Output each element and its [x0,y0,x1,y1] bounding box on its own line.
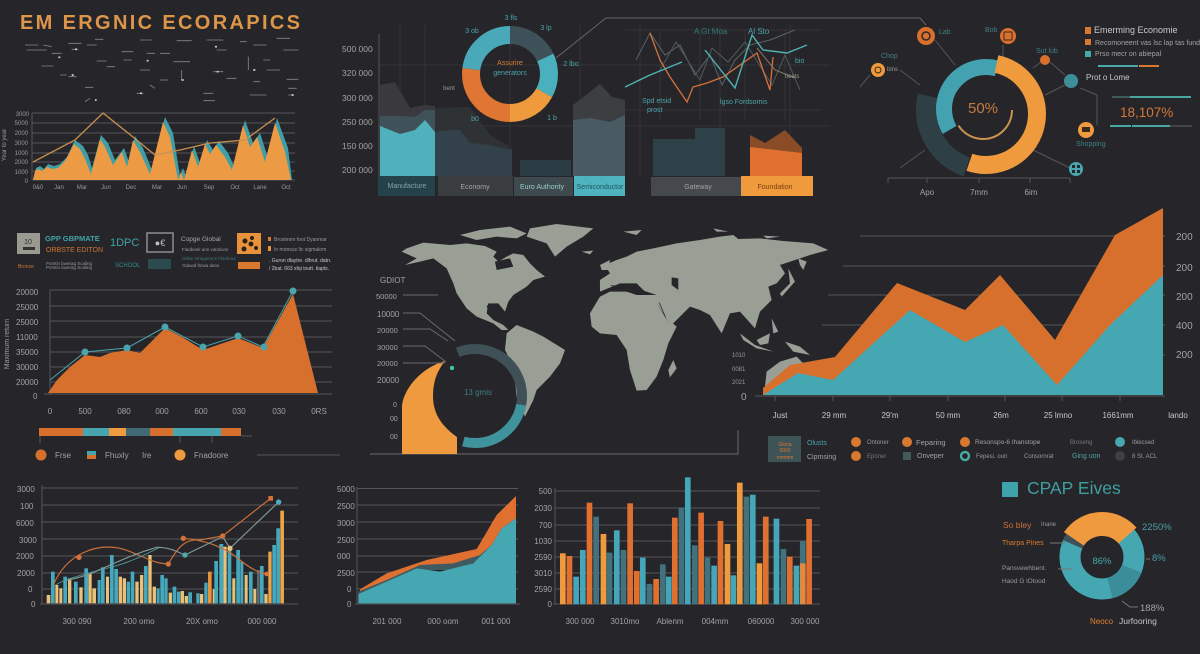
icon labels: Sut lub [1036,48,1058,55]
stacked area chart: bottom middle [337,485,520,626]
area chart: top left: 2000 [15,160,29,166]
layered bar chart: top center: 200 000 [342,165,373,175]
area line chart: middle left: 11000 [16,333,38,342]
area chart: top left: Mar [152,185,162,191]
donut labels: Assurire [497,60,523,67]
legend: top right: Prot o Lome [1086,73,1130,82]
left callout chart over map: GDIOT [380,276,405,285]
area chart: top left: 5000 [15,121,29,127]
legend: middle right: Broseng [1070,440,1092,446]
legend: middle right: Olusts [807,440,827,447]
legend: middle right: Ging uon [1072,453,1101,460]
layered bar chart: top center: Semiconductor [577,184,624,191]
KPI strip: middle left: Fladbank ann vatstions [182,247,229,252]
donut labels: bottom right: Haod G lOtood [1002,578,1046,585]
legend: middle right: Gloria [778,442,792,448]
line chart labels: tieets [785,74,799,80]
layered bar chart: top center: 320 000 [342,68,373,78]
area chart: top left: 3000 [15,141,29,147]
donut labels: bottom right: Inane [1041,522,1057,528]
area chart: top left: 0&0 [33,185,44,191]
donut labels: bottom right: Tharpa Pines [1002,540,1044,547]
layered bar chart: top center [342,25,830,196]
donut labels: bottom right: 8% [1152,553,1166,564]
left callout chart over map: 13 gmis [464,388,492,397]
layered bar chart: top center: 500 000 [342,44,373,54]
area line chart: middle left: 030 [232,407,246,416]
KPI strip: middle left: . Guron dlaytre. dlhrut. datn. [269,258,331,264]
area chart: top left: Year to year [2,129,8,161]
large area chart: middle right: 0 [741,392,747,403]
area chart: top left: Oct [230,185,240,191]
large area chart: middle right: lando [1168,411,1188,420]
icon labels: bins [887,67,898,73]
stacked timeline bar [39,428,340,455]
donut labels: 1 b [547,115,557,122]
legend: timeline bar: Fhuxly [105,451,129,460]
donut labels: bent [443,86,455,92]
donut labels: bottom right: Pansvewhbent. [1002,565,1047,572]
grouped bars and curves: bottom left: 0 [28,585,33,594]
left callout chart over map: 0 [393,402,397,409]
KPI strip: middle left: Pomtin laverag Scaling [46,261,93,266]
KPI strip: middle left: Gillen Onagerons Flanbour [182,256,237,261]
line chart labels: prost [647,107,663,114]
area line chart: middle left: 030 [272,407,286,416]
bar chart: bottom center right: 700 [539,521,553,530]
stacked area chart: bottom middle: 2500 [337,569,355,578]
KPI strip: middle left: In monsus ltc sigmalom [274,247,326,253]
multi-line chart: top center right [625,30,820,120]
KPI strip: middle left: 10 [24,239,32,246]
grouped bars and curves: bottom left: 000 000 [248,617,277,626]
large area chart: middle right: 26m [993,411,1009,420]
line chart labels: A Gt Moa [694,27,728,36]
stat: 18,107%: 18,107% [1120,105,1173,120]
icon labels: Shopping [1076,141,1106,148]
bottom axis: top right donut: 7mm [970,188,988,197]
large area chart: middle right [732,208,1193,420]
icon labels: Bob [985,27,998,34]
KPI strip: middle left: ORBSTE EDITON [46,247,103,254]
large area chart: middle right: 25 lmno [1044,411,1073,420]
stacked area chart: bottom middle: 001 000 [482,617,511,626]
legend: middle right: Cipmsing [807,454,836,461]
legend: timeline bar [36,450,229,460]
area chart: top left: Jan [54,185,64,191]
layered bar chart: top center: Gateway [684,184,712,191]
line chart labels: Al Sto [748,27,770,36]
area line chart: middle left: 25000 [16,318,39,327]
donut labels: bottom right: Neoco [1090,617,1114,626]
legend: middle right [768,436,1158,462]
layered bar chart: top center: Economy [460,184,490,191]
left callout chart over map: 20000 [377,376,400,385]
dotted world map, top left [25,38,298,102]
inland seas on map [487,258,678,325]
donut labels: 3 lp [540,25,552,32]
layered bar chart: top center: Euro Authority [520,184,564,191]
legend: middle right: Onveper [917,453,945,460]
bottom axis: top right donut [888,178,1070,197]
area line chart: middle left: 500 [78,407,92,416]
KPI strip: middle left: / 2bat. 663 sfqi toutt. tiapts. [269,266,329,272]
donut labels [443,15,579,123]
line chart labels: lgso Fordsomis [720,99,768,106]
large area chart: middle right: 29 mm [822,411,847,420]
icon labels: Chop [881,53,898,60]
line chart labels [642,27,804,114]
legend: middle right: Eponer [867,454,886,460]
line chart labels: Spd etsid [642,98,671,105]
stacked area chart: bottom middle: 3000 [337,519,355,528]
title: EM ERGNIC ECORAPICS [20,12,300,34]
connector line: donut to top right [556,18,926,58]
area line chart: middle left: 0 [33,392,38,401]
line chart labels: bio [795,58,804,65]
KPI strip: middle left: ●€ [155,238,165,248]
area chart: top left [2,112,295,191]
layered bar chart: top center: Manufacture [388,183,427,190]
donut labels: bottom right: So bley [1003,520,1032,530]
legend: top right: Prso mecr on abiepal [1095,51,1162,58]
donut labels: generators [493,70,527,77]
KPI strip: middle left: Bronze [18,264,34,270]
area chart: top left: Jun [101,185,111,191]
large area chart: middle right: 1661mm [1102,411,1134,420]
donut labels: bottom right: Jurfooring [1119,616,1157,626]
KPI strip: middle left: GPP GBPMATE [45,234,100,243]
large area chart: middle right: 29'm [881,411,899,420]
bar chart: bottom center right: 3010mo [611,617,640,626]
legend: middle right: 8 St. ACL [1132,454,1158,460]
left callout chart over map: 30000 [377,343,398,352]
large area chart: middle right: 200 [1176,263,1193,274]
bar chart: bottom center right: 2590 [534,553,553,562]
bottom axis: top right donut: Apo [920,188,935,197]
grouped bars and curves: bottom left: 3000 [17,485,35,494]
donut labels: bottom right: 2250% [1142,522,1172,533]
left callout chart over map: 20000 [377,326,398,335]
layered bar chart: top center: 250 000 [342,117,373,127]
stacked area chart: bottom middle: 0 [347,600,352,609]
area chart: top left: 0 [25,179,29,185]
large area chart: middle right: 400 [1176,321,1193,332]
donut labels: bottom right: 86% [1092,556,1112,567]
left callout chart over map: 50000 [376,292,397,301]
area chart: top left: Dec [126,185,136,191]
legend: middle right: Resonspo-6 Ihanstope [975,439,1041,446]
stacked area chart: bottom middle: 5000 [337,485,355,494]
bar chart: bottom center right: 300 000 [566,617,595,626]
area chart: top left: 3000 [16,112,30,118]
large area chart: middle right: 200 [1176,232,1193,243]
area line chart: middle left: Maximum return [4,319,11,369]
legend: middle right: 0000 [779,448,791,454]
legend: top right: Recomoneent vas lsc lap tas fund [1095,40,1200,47]
center value: 50%: 50% [968,100,998,117]
area chart: top left: 2000 [15,131,29,137]
KPI strip: middle left: Gdawd fsrwa dans [182,263,220,268]
KPI strip: middle left [17,233,331,272]
bar chart: bottom center right: 3010 [534,569,553,578]
large area chart: middle right: Just [773,411,788,420]
legend: middle right: mmmm [777,455,793,461]
donut labels: 3 fls [505,15,518,22]
KPI strip: middle left: 1DPC [110,237,139,249]
large area chart: middle right: 0081 [732,367,746,373]
grouped bars and curves: bottom left: 2000 [17,569,35,578]
bar chart: bottom center right: 060000 [748,617,775,626]
grouped bars and curves: bottom left: 200 omo [123,617,155,626]
heading: CPAP Eives: CPAP Eives [1027,478,1121,498]
legend: top right [1085,25,1200,82]
legend: middle right: Fepesi. oun [976,454,1007,460]
area chart: top left: 1000 [15,151,29,157]
area line chart: middle left: 000 [155,407,169,416]
area chart: top left: 1000 [15,170,29,176]
donut labels: 3 ob [465,28,479,35]
donut chart: bottom right [1068,524,1136,592]
bottom axis: top right donut: 6im [1025,188,1038,197]
grouped bars and curves: bottom left [16,485,298,626]
bar chart: bottom center right: 0 [548,600,553,609]
large area chart: middle right: 1010 [732,353,746,359]
KPI strip: middle left: SCHOOL [115,263,141,269]
stacked area chart: bottom middle: 2500 [337,502,355,511]
layered bar chart: top center: 150 000 [342,141,373,151]
area line chart: middle left: 080 [117,407,131,416]
left callout chart over map: 20000 [377,359,398,368]
area line chart: middle left: 20000 [16,378,39,387]
legend: middle right: Ontoner [867,440,889,446]
icons around top right donut [871,27,1094,176]
large area chart: middle right: 2021 [732,380,746,386]
grouped bars and curves: bottom left: 20X omo [186,617,219,626]
donut chart: top right [926,50,1046,170]
area line chart: middle left: 35000 [16,348,39,357]
donut labels: 2 lbo [563,61,579,68]
icon labels [881,27,1106,148]
stat: 18,107% [1110,96,1192,127]
grouped bars and curves: bottom left: 0 [31,600,36,609]
layered bar chart: top center: 300 000 [342,93,373,103]
large area chart: middle right: 50 mm [936,411,961,420]
grouped bars and curves: bottom left: 300 090 [63,617,92,626]
bar chart: bottom center right: 1030 [534,537,553,546]
KPI strip: middle left: Brosteom foot Dyanmar [274,237,327,243]
legend: middle right: Feparing [916,438,946,447]
large area chart: middle right: 200 [1176,292,1193,303]
area chart: top left: Jun [177,185,187,191]
grouped bars and curves: bottom left: 3000 [19,536,37,545]
stacked area chart: bottom middle: 0 [347,585,352,594]
bar chart: bottom center right [534,477,820,626]
stacked area chart: bottom middle: 000 oom [427,617,459,626]
stacked area chart: bottom middle: 201 000 [373,617,402,626]
legend: timeline bar: Fnadoore [194,451,229,460]
area line chart: middle left: 0RS [311,407,327,416]
area line chart: middle left: 30000 [16,363,39,372]
grouped bars and curves: bottom left: 2000 [16,552,34,561]
area chart: top left: Mar [77,185,87,191]
donut chart: top center [471,35,549,113]
area line chart: middle left: 600 [194,407,208,416]
layered bar chart: top center: Foundation [757,184,793,191]
bar chart: bottom center right: 500 [539,487,553,496]
legend: middle right: Consornrat [1024,454,1054,460]
area line chart: middle left: 0 [48,407,53,416]
bar chart: bottom center right: Ablenm [656,617,684,626]
grouped bars and curves: bottom left: 100 [20,502,34,511]
area line chart: middle left [4,288,332,416]
left callout chart over map: 00 [390,434,398,441]
large area chart: middle right: 200 [1176,350,1193,361]
left callout chart over map [370,276,738,454]
KPI strip: middle left: Pomtin laverag Scaling [46,265,93,270]
grouped bars and curves: bottom left: 6000 [16,519,34,528]
legend: middle right: Iblecsed [1132,440,1154,446]
area line chart: middle left: 25000 [16,303,39,312]
bar chart: bottom center right: 2030 [534,504,553,513]
connector lines: top right donut [860,40,1097,168]
bar chart: bottom center right: 300 000 [791,617,820,626]
left callout chart over map: 00 [390,416,398,423]
left callout chart over map: 10000 [377,310,400,319]
legend: timeline bar: Frse [55,451,72,460]
donut labels: bottom right [1002,520,1172,626]
donut labels: b0 [471,116,479,123]
area chart: top left: Lane [253,185,267,191]
legend: top right: Emerming Economie [1094,25,1178,35]
bar chart: bottom center right: 004mm [702,617,729,626]
KPI strip: middle left: Copge Global [181,236,221,243]
icon labels: Lab [939,29,951,36]
world map [402,224,828,417]
bar chart: bottom center right: 2590 [534,585,553,594]
area chart: top left: Sep [204,185,215,191]
stacked area chart: bottom middle: 2500 [337,536,355,545]
stacked area chart: bottom middle: 000 [337,552,351,561]
area line chart: middle left: 20000 [16,288,39,297]
legend: timeline bar: Ire [142,451,152,460]
donut labels: bottom right: 188% [1140,603,1165,614]
area chart: top left: Oct [281,185,291,191]
